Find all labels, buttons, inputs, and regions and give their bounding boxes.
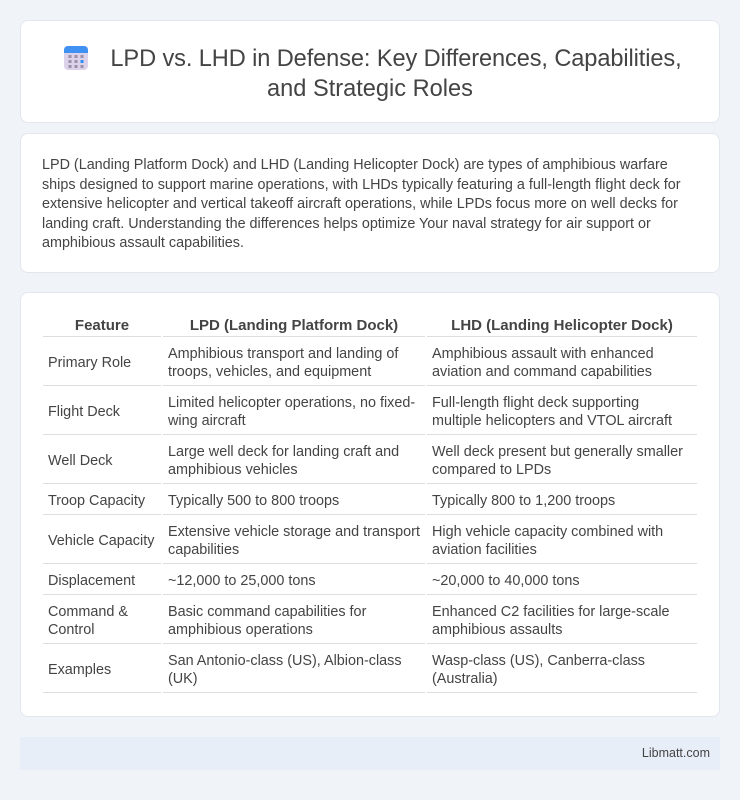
row: command and control: amphibious operations [168,622,313,638]
table header: Feature [75,317,129,334]
row: well deck: compared to LPDs [432,462,551,478]
row: well deck [48,444,683,478]
row: command and control: Command & [48,604,128,620]
row: vehicle capacity: High vehicle capacity combined with [432,524,663,540]
row: flight deck: Limited helicopter operations, no fixed- [168,395,415,411]
row: vehicle capacity [48,524,663,558]
row: command and control: amphibious assaults [432,622,562,638]
panel: comparison table [20,292,720,717]
row: command and control: Basic command capabilities for [168,604,366,620]
row: well deck: Large well deck for landing craft and [168,444,399,460]
intro text: ships designed to support marine operations, with LHDs typically featuring a full-length flight deck for [42,176,681,192]
intro text [42,157,681,251]
row: displacement: ~12,000 to 25,000 tons [168,573,316,589]
row: examples [48,653,645,687]
row: vehicle capacity: Extensive vehicle storage and transport [168,524,420,540]
row: troop capacity [48,493,615,509]
row: well deck: Well deck present but generally smaller [432,444,683,460]
footer [20,737,720,770]
row: examples: Wasp-class (US), Canberra-class [432,653,645,669]
row: troop capacity: Typically 800 to 1,200 troops [432,493,615,509]
row: primary role: Amphibious transport and landing of [168,346,398,362]
row: primary role: aviation and command capabilities [432,364,652,380]
row: flight deck: wing aircraft [168,413,246,429]
title: LPD vs. LHD in Defense: Key Differences, Capabilities, [110,46,682,72]
row: vehicle capacity: capabilities [168,542,239,558]
row: displacement: ~20,000 to 40,000 tons [432,573,580,589]
row: command and control: Control [48,622,94,638]
row: displacement: Displacement [48,573,135,589]
row: well deck: Well Deck [48,453,113,469]
icon: calendar [64,46,88,70]
row: vehicle capacity: Vehicle Capacity [48,533,154,549]
row: flight deck: multiple helicopters and VTOL aircraft [432,413,672,429]
row: flight deck: Full-length flight deck supporting [432,395,639,411]
row: primary role [48,346,654,380]
row: primary role: Primary Role [48,355,131,371]
title: and Strategic Roles [267,76,473,102]
intro text: amphibious assault capabilities. [42,235,244,251]
intro text: extensive helicopter and vertical takeoff aircraft operations, while LPDs focus more on well decks for [42,196,678,212]
row: examples: Examples [48,662,111,678]
row: well deck: amphibious vehicles [168,462,298,478]
row: examples: (UK) [168,671,198,687]
footer credit: Libmatt.com [642,746,710,760]
row: examples: San Antonio-class (US), Albion-class [168,653,402,669]
row: vehicle capacity: aviation facilities [432,542,537,558]
row: flight deck [48,395,672,429]
row: command and control [48,604,670,638]
panel: title card [20,20,720,123]
row: examples: (Australia) [432,671,498,687]
intro text: landing craft. Understanding the differences helps optimize Your naval strategy for air support or [42,216,651,232]
table header [75,317,673,334]
title [110,46,682,102]
row: troop capacity: Troop Capacity [48,493,145,509]
row: troop capacity: Typically 500 to 800 troops [168,493,339,509]
row: primary role: troops, vehicles, and equipment [168,364,371,380]
panel: introduction [20,133,720,273]
row: command and control: Enhanced C2 facilities for large-scale [432,604,670,620]
table header: LPD (Landing Platform Dock) [190,317,398,334]
row: displacement [48,573,580,589]
row: primary role: Amphibious assault with enhanced [432,346,654,362]
table header: LHD (Landing Helicopter Dock) [451,317,673,334]
row: flight deck: Flight Deck [48,404,120,420]
intro text: LPD (Landing Platform Dock) and LHD (Landing Helicopter Dock) are types of amphibious warfare [42,157,668,173]
